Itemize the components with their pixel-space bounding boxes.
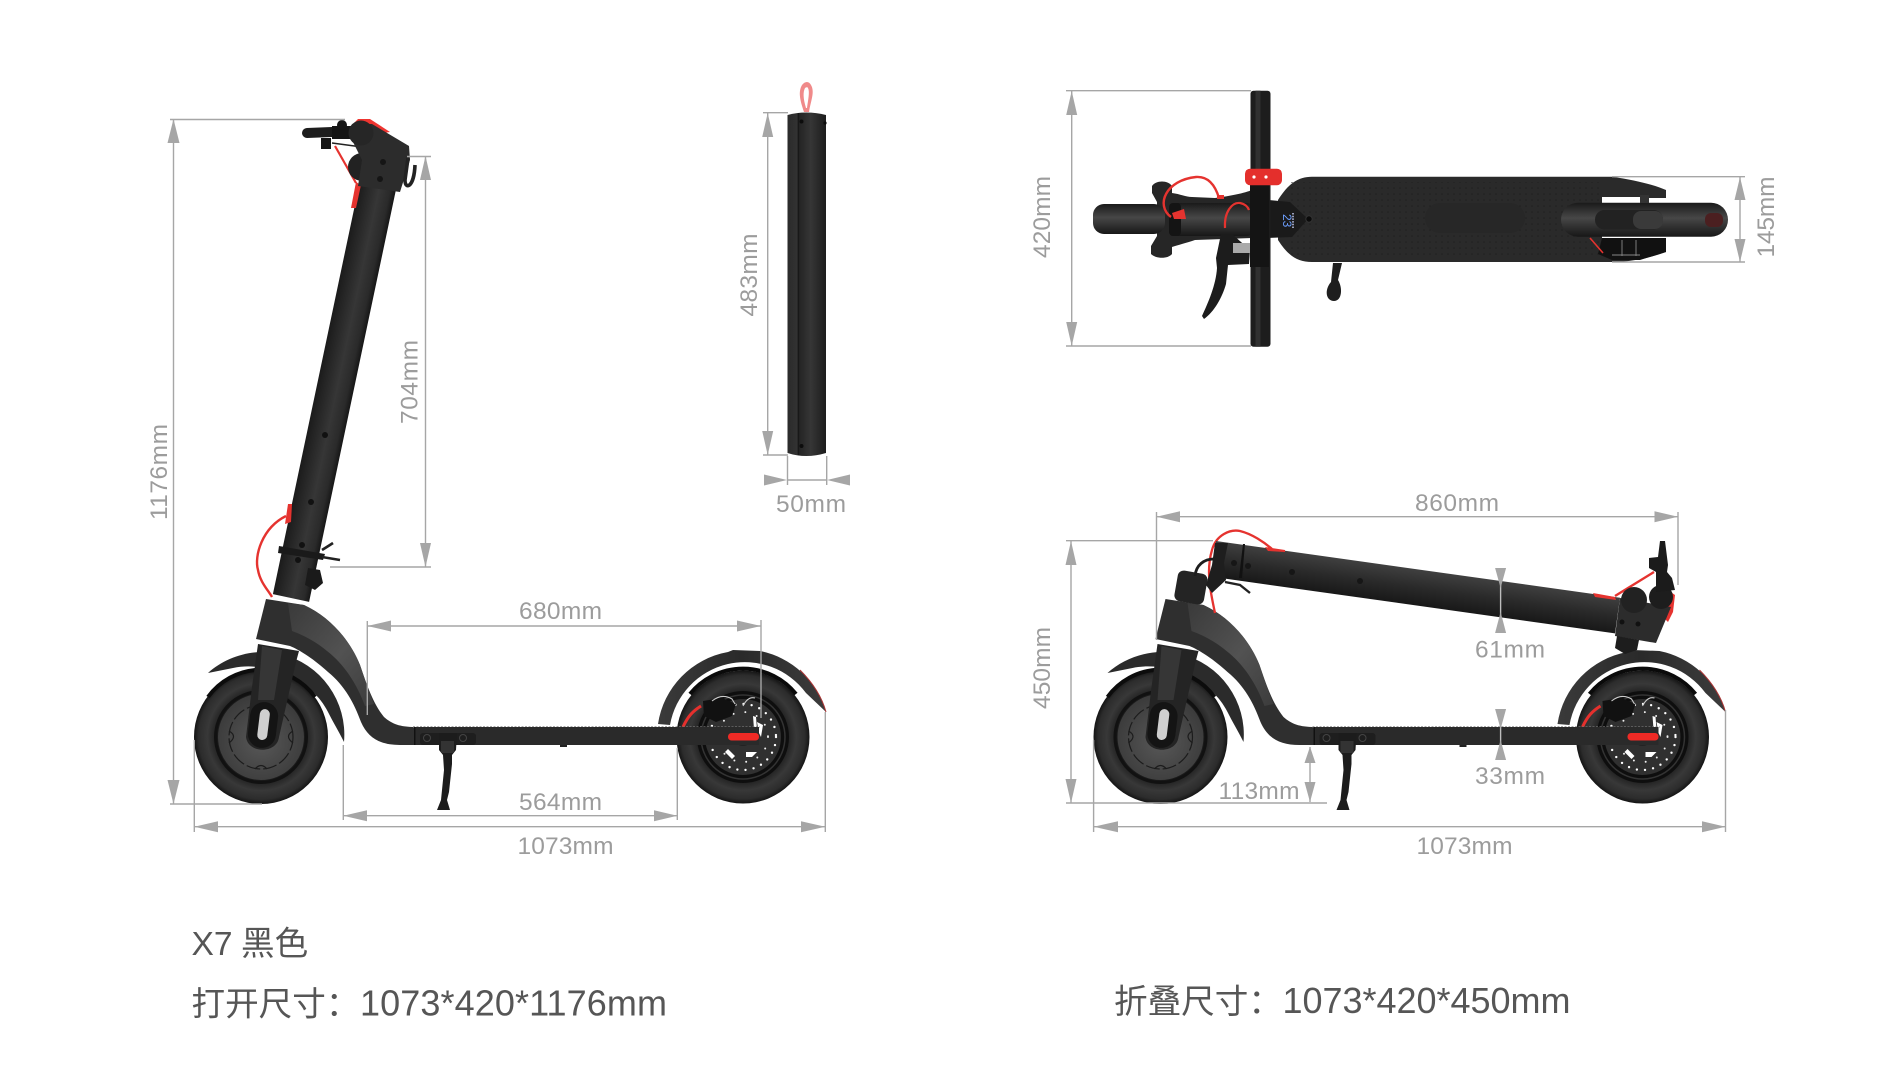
red clamp collar xyxy=(1245,169,1282,185)
dimension: 1176mm height xyxy=(146,119,345,804)
folding stem tube xyxy=(273,183,396,602)
dimension: 1073mm folded length xyxy=(1094,710,1726,860)
scooter base: wheels, fenders, neck and deck xyxy=(194,599,826,810)
folded scooter base xyxy=(1094,599,1726,810)
battery pull loop xyxy=(800,82,813,112)
kickstand xyxy=(1327,263,1342,301)
display stem plate: 23 xyxy=(1280,214,1294,228)
dimension: 113mm clearance xyxy=(1218,747,1316,805)
battery body xyxy=(788,112,827,456)
dimension: 680mm deck: 680mm xyxy=(519,598,602,625)
dimension: 564mm wheel gap xyxy=(343,745,677,821)
dimension: 50mm xyxy=(764,456,850,518)
deck plate xyxy=(1278,177,1666,262)
display stem plate xyxy=(1268,200,1312,238)
caption: model and colour: X7 xyxy=(192,926,233,963)
rear wheel and fender xyxy=(1561,195,1728,260)
dimension: 704mm stem: 704mm xyxy=(396,340,423,424)
red brake cables xyxy=(1164,177,1249,228)
panel: battery xyxy=(736,82,850,518)
caption: model and colour: 黑色 xyxy=(241,916,308,965)
dimension: 860mm: 860mm xyxy=(1415,490,1499,517)
panel: unfolded scooter side view xyxy=(146,119,826,860)
panel: folded scooter side view xyxy=(1029,490,1726,860)
steering cylinder and hook xyxy=(1173,559,1214,605)
dimension: 420mm: 420mm xyxy=(1029,176,1056,258)
handlebar xyxy=(1250,91,1270,347)
dimension: 1073mm length: 1073mm xyxy=(518,833,614,860)
caption: unfolded size: 打开尺寸： xyxy=(192,976,359,1026)
dimension: 61mm tube: 61mm xyxy=(1475,637,1545,664)
front steering body xyxy=(1093,182,1253,258)
dimension: 1073mm folded length: 1073mm xyxy=(1416,833,1512,860)
dimension: 1176mm height: 1176mm xyxy=(146,424,173,520)
handlebar head xyxy=(307,119,415,208)
dimension: 483mm xyxy=(736,113,788,455)
folded stem tube xyxy=(1206,541,1620,633)
dimension: 33mm deck: 33mm xyxy=(1475,763,1545,790)
dimension: 113mm clearance: 113mm xyxy=(1218,778,1300,805)
dimension: 1073mm length xyxy=(194,712,825,860)
caption: folded size: 折叠尺寸： xyxy=(1114,974,1282,1023)
dimension: 860mm xyxy=(1156,490,1678,640)
dimension: 420mm xyxy=(1029,91,1251,346)
dimension: 145mm xyxy=(1612,176,1780,262)
caption: unfolded size: 1073*420*1176mm xyxy=(360,982,667,1024)
dimension: 61mm tube xyxy=(1475,568,1545,664)
folded handlebar head xyxy=(1593,541,1675,654)
dimension: 450mm: 450mm xyxy=(1029,627,1056,709)
folded red cable xyxy=(1209,531,1272,613)
red safety cable and latch xyxy=(257,504,292,597)
brake lever xyxy=(1202,234,1250,319)
caption: folded size: 1073*420*450mm xyxy=(1282,980,1570,1021)
dimension: 33mm deck xyxy=(1475,709,1545,790)
dimension: 704mm stem xyxy=(330,156,431,567)
dimension: 50mm: 50mm xyxy=(776,491,846,518)
dimension: 680mm deck xyxy=(367,598,761,718)
dimension: 564mm wheel gap: 564mm xyxy=(519,789,602,816)
dimension: 483mm: 483mm xyxy=(736,234,763,316)
dimension: 145mm: 145mm xyxy=(1753,176,1780,258)
dimension: 450mm xyxy=(1029,541,1327,803)
panel: top view xyxy=(1029,91,1780,347)
